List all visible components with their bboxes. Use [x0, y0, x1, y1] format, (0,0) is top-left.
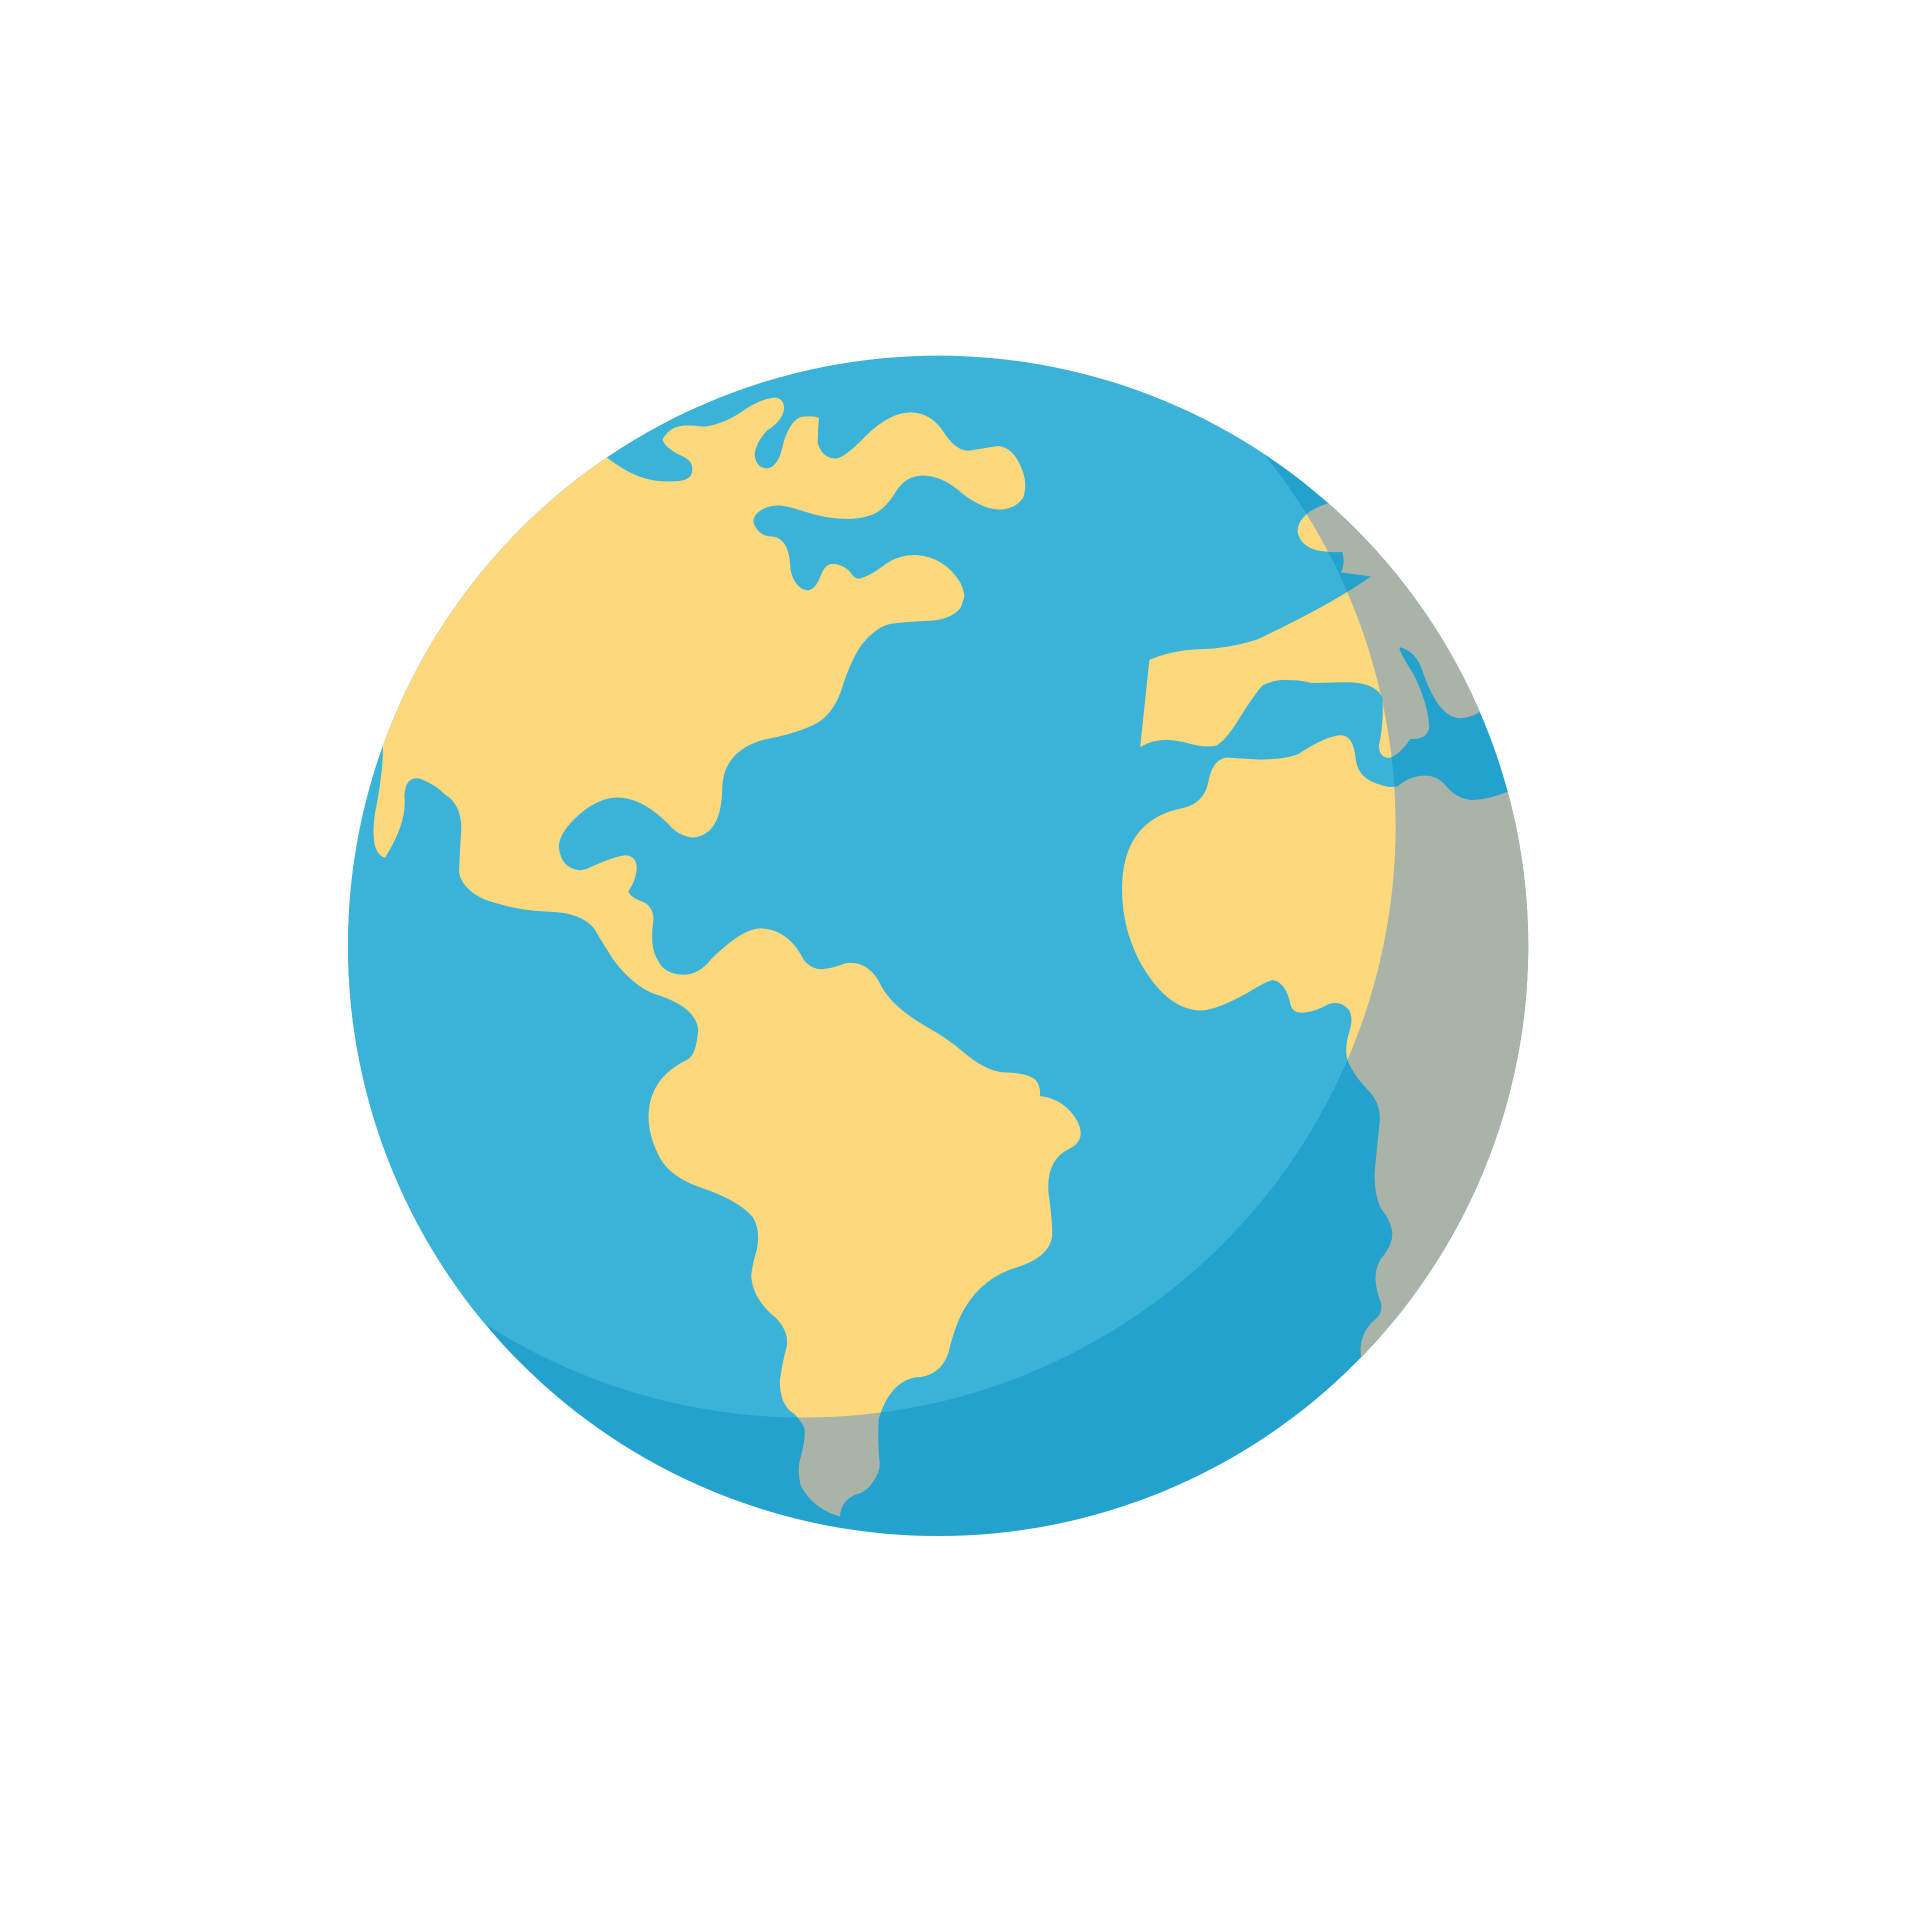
shaded land — [383, 458, 1528, 1516]
lit americas — [374, 398, 1081, 1418]
lit europe — [1140, 514, 1392, 758]
globe — [348, 356, 1528, 1536]
shaded europe — [1306, 503, 1480, 757]
globe illustration — [348, 356, 1528, 1536]
shaded side of globe — [348, 356, 1528, 1536]
lit ocean — [348, 356, 1396, 1418]
shaded ocean — [348, 356, 1528, 1536]
lit africa — [1122, 735, 1396, 1060]
shaded americas — [383, 458, 881, 1516]
lit land — [374, 398, 1396, 1418]
shaded africa — [1348, 776, 1528, 1358]
lit side of globe — [348, 356, 1396, 1418]
